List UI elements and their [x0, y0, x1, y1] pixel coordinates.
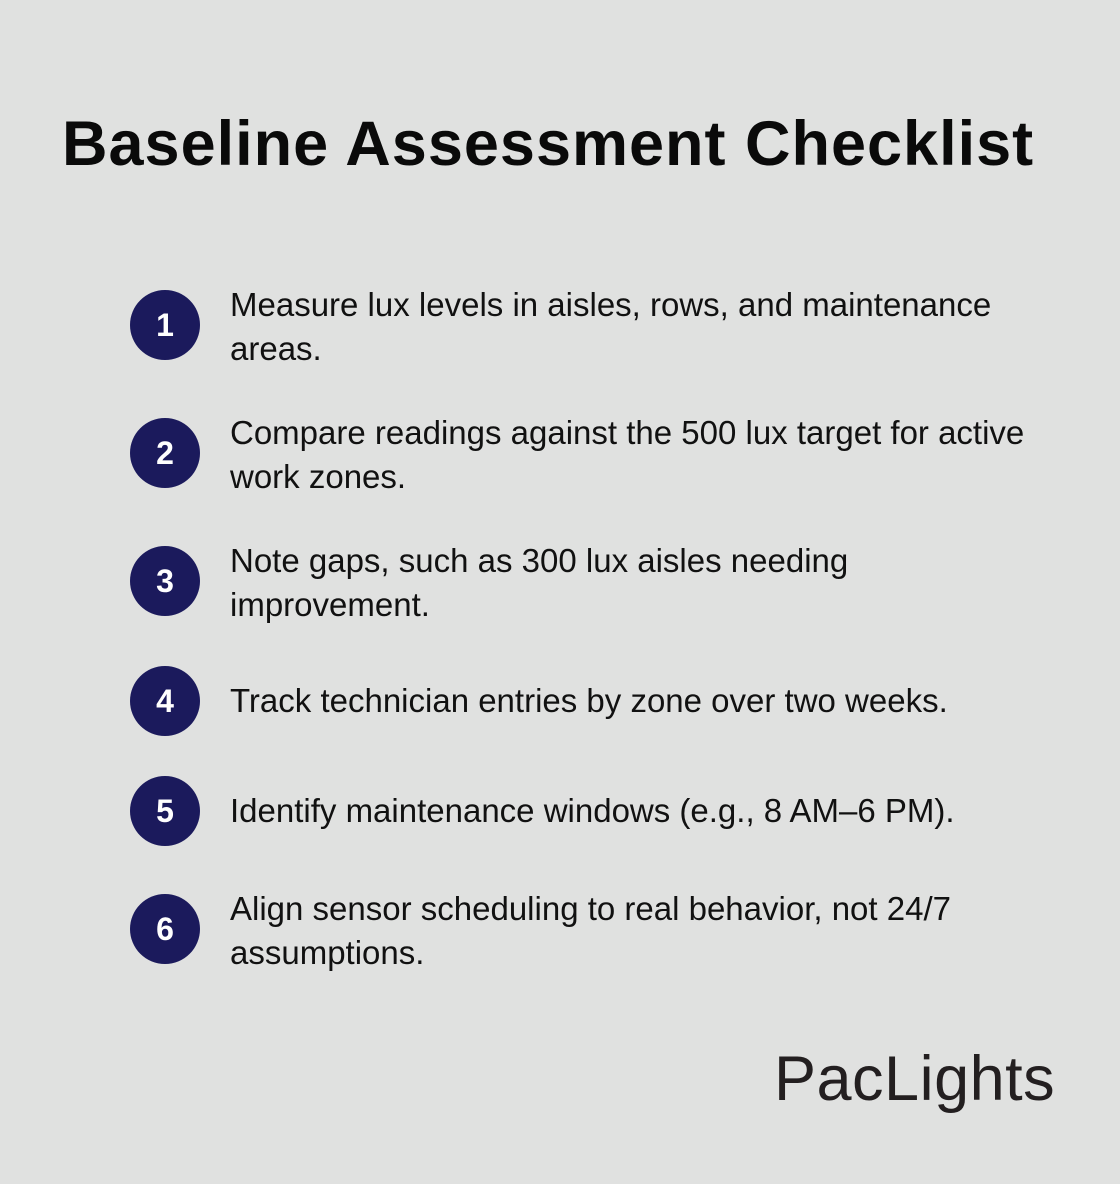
- item 6: assumptions.: [230, 934, 424, 971]
- item 4: 4: [156, 683, 174, 719]
- item 5: Identify maintenance windows (e.g., 8 AM–6 PM).: [230, 792, 955, 829]
- item 2: work zones.: [230, 458, 406, 495]
- item 3: improvement.: [230, 586, 430, 623]
- item 6: Align sensor scheduling to real behavior, not 24/7: [230, 890, 951, 927]
- item 4: [130, 666, 948, 736]
- item 1: 1: [156, 307, 174, 343]
- item 1: Measure lux levels in aisles, rows, and maintenance: [230, 286, 991, 323]
- item 1: [130, 286, 991, 367]
- item 2: Compare readings against the 500 lux target for active: [230, 414, 1024, 451]
- item 5: 5: [156, 793, 174, 829]
- item 2: 2: [156, 435, 174, 471]
- item 4: Track technician entries by zone over two weeks.: [230, 682, 948, 719]
- item 6: 6: [156, 911, 174, 947]
- item 5: [130, 776, 955, 846]
- logo: PacLights: [774, 1044, 1055, 1114]
- item 6: [130, 890, 951, 971]
- item 3: [130, 542, 848, 623]
- item 2: [130, 414, 1024, 495]
- item 3: Note gaps, such as 300 lux aisles needing: [230, 542, 848, 579]
- item 1: areas.: [230, 330, 322, 367]
- item 3: 3: [156, 563, 174, 599]
- title: Baseline Assessment Checklist: [62, 109, 1034, 179]
